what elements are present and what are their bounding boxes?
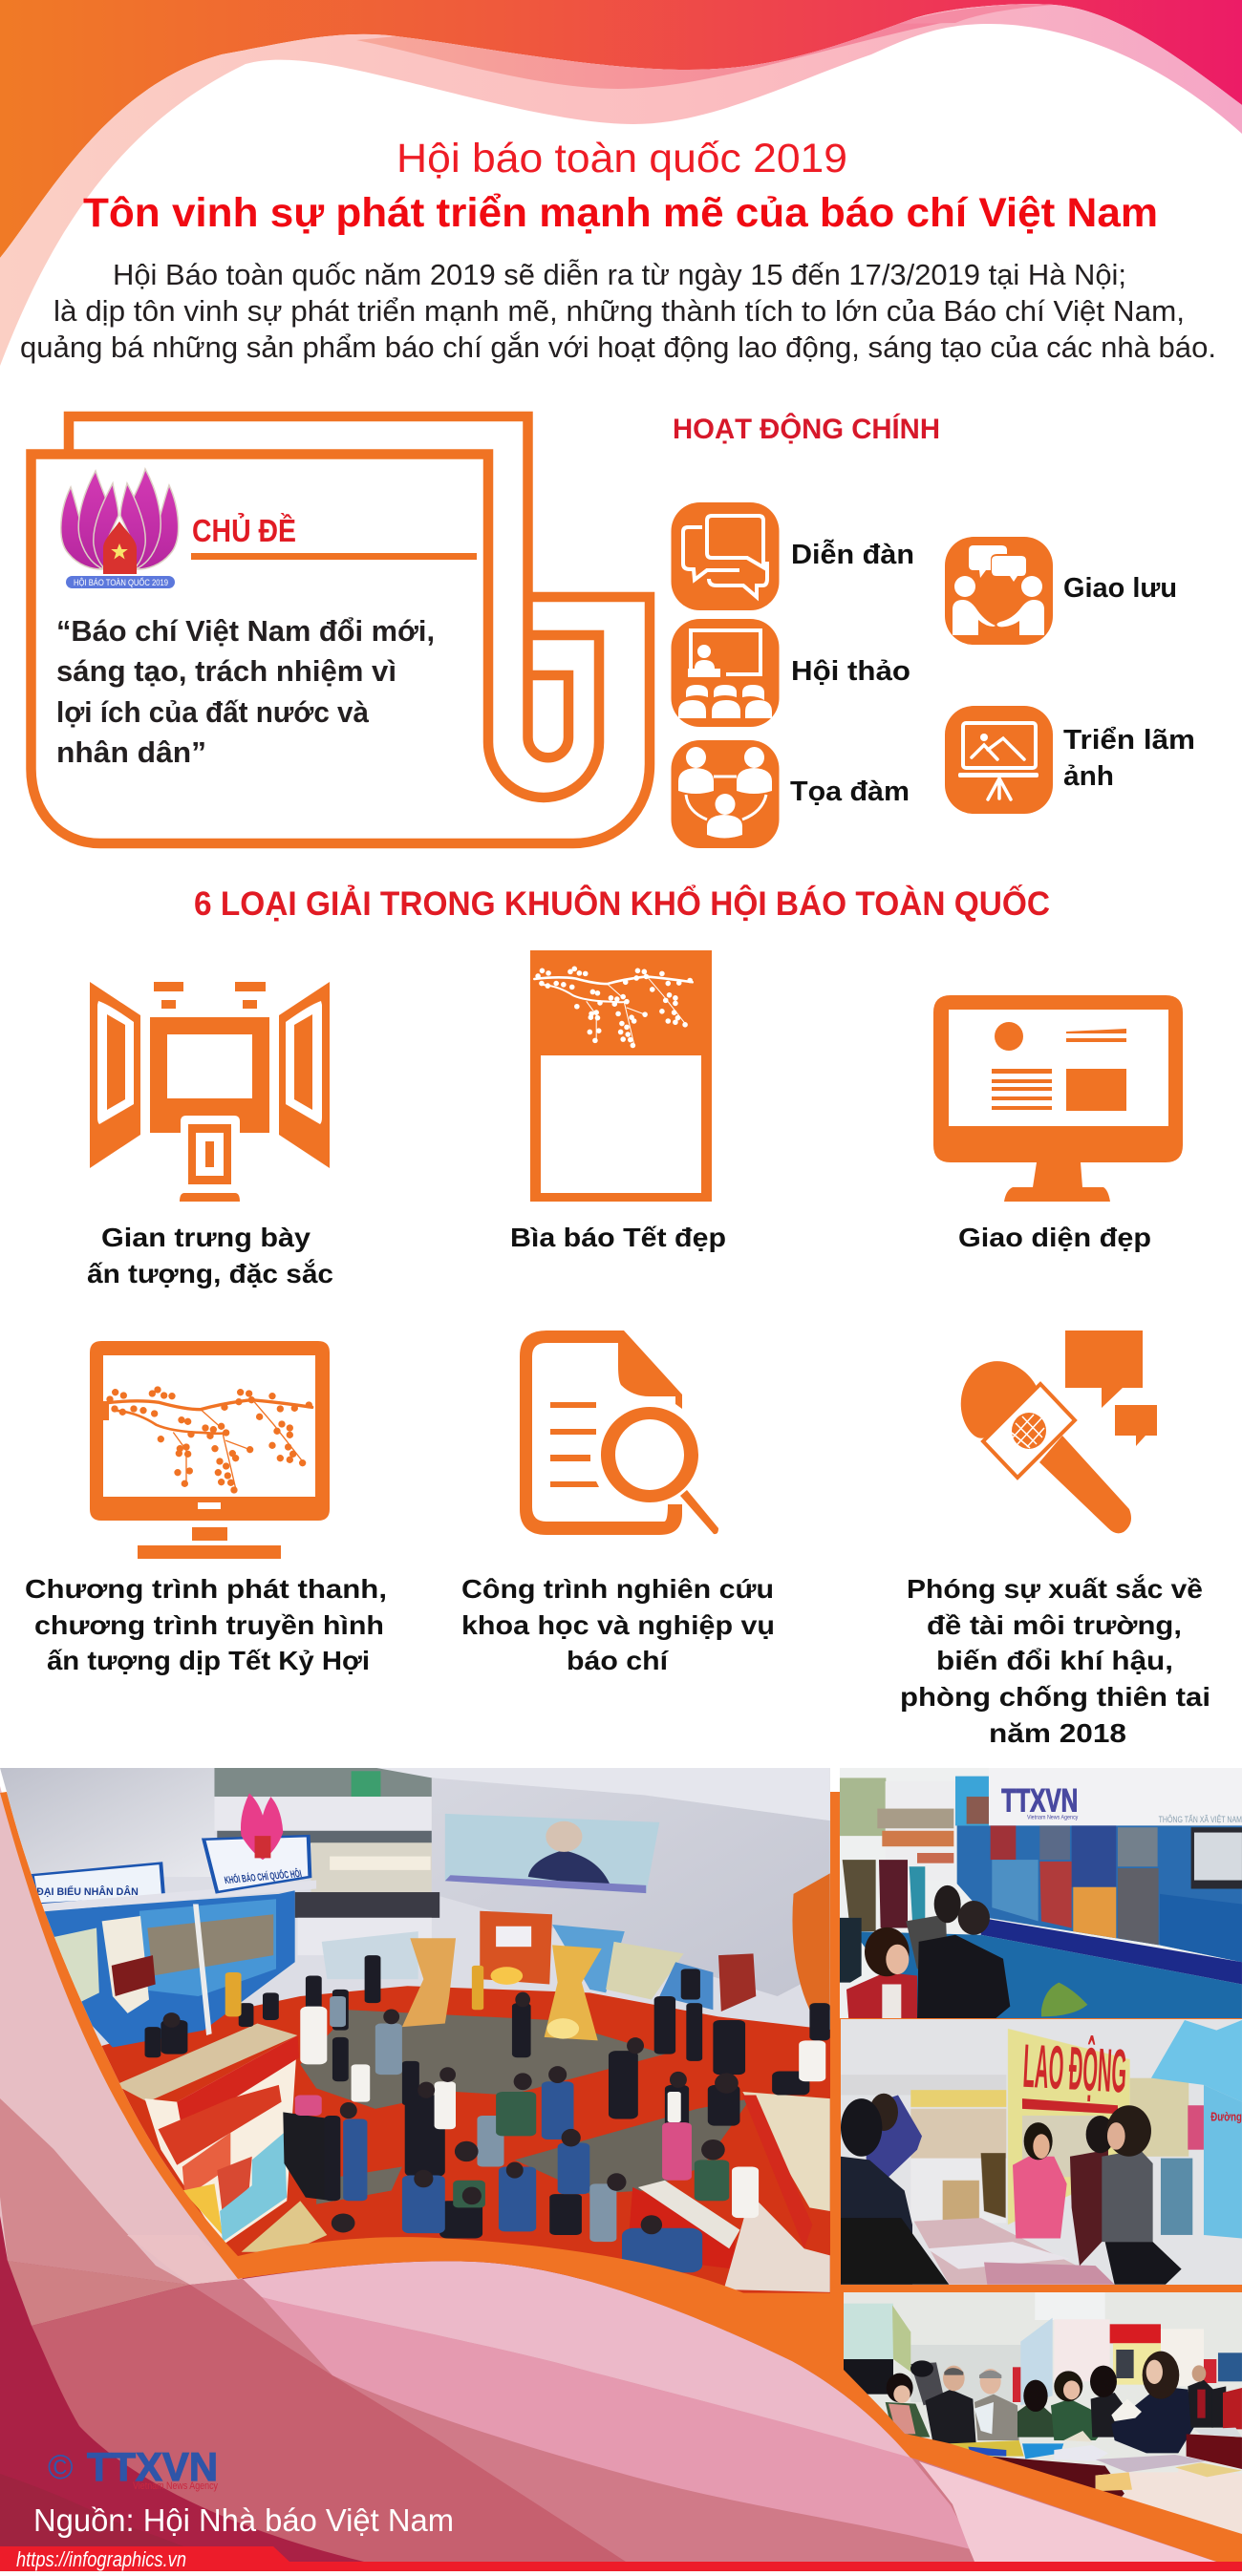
photo: Công an nhân dân stand	[841, 2290, 1242, 2543]
photo: TTXVN stand: Vietnam News Agency	[1027, 1814, 1079, 1820]
logo: Hội báo toàn quốc 2019 lotus: HỘI BÁO TOÀN QUỐC 2019	[74, 577, 168, 588]
award: environmental reporting	[900, 1331, 1210, 1748]
icon: talk	[671, 740, 780, 848]
icon: document with magnifier	[520, 1331, 718, 1535]
award: radio and TV programmes	[25, 1341, 387, 1675]
top wave header	[0, 0, 1242, 366]
theme quote: lợi ích của đất nước và	[56, 695, 370, 729]
title: Tôn vinh sự phát triển mạnh mẽ của báo chí Việt Nam	[83, 190, 1158, 236]
caption	[900, 1574, 1210, 1748]
caption: phòng chống thiên tai	[900, 1682, 1210, 1712]
theme quote	[56, 614, 435, 769]
photo: TTXVN stand: TTXVN	[1001, 1781, 1078, 1819]
caption: Giao diện đẹp	[958, 1223, 1151, 1252]
title	[83, 136, 1158, 236]
icon: workshop	[671, 619, 780, 727]
intro text: Hội Báo toàn quốc năm 2019 sẽ diễn ra từ ngày 15 đến 17/3/2019 tại Hà Nội;	[113, 258, 1126, 291]
icon: exchange	[945, 537, 1053, 645]
caption: khoa học và nghiệp vụ	[461, 1610, 775, 1640]
bottom background layers	[0, 1786, 1242, 2571]
label: hội thảo: Hội thảo	[791, 656, 910, 687]
logo: TTXVN: ©	[48, 2447, 74, 2486]
icon: photo exhibition	[945, 706, 1053, 814]
icon: booth	[90, 982, 330, 1202]
label: giao lưu: Giao lưu	[1063, 573, 1177, 604]
logo: TTXVN: Vietnam News Agency	[133, 2480, 218, 2492]
caption: đề tài môi trường,	[927, 1610, 1182, 1640]
panel: theme newspaper	[31, 416, 650, 843]
caption: chương trình truyền hình	[34, 1610, 384, 1640]
icon: newspaper cover with branch	[530, 950, 712, 1202]
photo: main exhibition hall: KHỐI BÁO CHÍ QUỐC HỘI	[223, 1866, 303, 1885]
caption: biến đổi khí hậu,	[936, 1646, 1173, 1675]
intro text: quảng bá những sản phẩm báo chí gắn với hoạt động lao động, sáng tạo của các nhà báo.	[20, 330, 1216, 364]
logo: TTXVN: TTXVN	[87, 2444, 218, 2489]
label: triển lãm ảnh	[1063, 725, 1195, 792]
theme quote: sáng tạo, trách nhiệm vì	[56, 654, 396, 688]
title: Hội báo toàn quốc 2019	[396, 136, 847, 181]
newspaper outline	[31, 416, 650, 843]
photo: main exhibition hall	[0, 1768, 836, 2293]
photo: Lao Động stand	[839, 2018, 1242, 2288]
caption: Chương trình phát thanh,	[25, 1574, 387, 1604]
caption: Công trình nghiên cứu	[461, 1574, 774, 1604]
award: research works	[461, 1331, 775, 1675]
source text: Nguồn: Hội Nhà báo Việt Nam	[33, 2502, 454, 2538]
caption	[25, 1574, 387, 1675]
caption: Bìa báo Tết đẹp	[510, 1223, 726, 1252]
website link: https://infographics.vn	[16, 2547, 186, 2571]
heading rule	[191, 553, 477, 560]
photo: TTXVN stand	[838, 1767, 1242, 2020]
heading: hoạt động chính: HOẠT ĐỘNG CHÍNH	[673, 413, 940, 445]
caption: ấn tượng dịp Tết Kỷ Hợi	[47, 1646, 370, 1675]
icon: forum	[671, 502, 780, 610]
caption: năm 2018	[989, 1718, 1126, 1748]
orange frame band	[0, 1792, 1242, 2570]
label: tọa đàm: Tọa đàm	[790, 777, 910, 807]
label: diễn đàn: Diễn đàn	[791, 538, 914, 570]
logo: Hội báo toàn quốc 2019 lotus	[61, 469, 179, 588]
award: Tet cover	[510, 950, 726, 1252]
icon: monitor with branch	[90, 1341, 330, 1559]
intro text: là dịp tôn vinh sự phát triển mạnh mẽ, những thành tích to lớn của Báo chí Việt Nam,	[54, 294, 1185, 328]
icon: desktop monitor	[933, 995, 1183, 1202]
caption	[87, 1223, 333, 1288]
footer red bar	[0, 2546, 1242, 2571]
photo: main exhibition hall: ĐẠI BIỂU NHÂN DÂN	[36, 1884, 139, 1897]
heading: chủ đề: CHỦ ĐỀ	[192, 513, 296, 548]
caption	[461, 1574, 775, 1675]
theme quote: “Báo chí Việt Nam đổi mới,	[56, 614, 435, 648]
intro text	[20, 258, 1216, 364]
caption: Gian trưng bày	[101, 1223, 310, 1252]
award: exhibition booth	[87, 982, 333, 1288]
theme quote: nhân dân”	[56, 735, 206, 769]
panel: main activities	[671, 413, 1195, 848]
icon: microphone and speech bubbles	[961, 1331, 1157, 1533]
label: triển lãm ảnh: Triển lãm	[1063, 725, 1195, 756]
award: web interface	[933, 995, 1183, 1252]
caption: báo chí	[567, 1646, 669, 1675]
label: triển lãm ảnh: ảnh	[1063, 761, 1114, 792]
heading: six awards: 6 LOẠI GIẢI TRONG KHUÔN KHỔ HỘI BÁO TOÀN QUỐC	[194, 884, 1050, 923]
caption: Phóng sự xuất sắc về	[907, 1574, 1203, 1604]
caption: ấn tượng, đặc sắc	[87, 1259, 333, 1288]
